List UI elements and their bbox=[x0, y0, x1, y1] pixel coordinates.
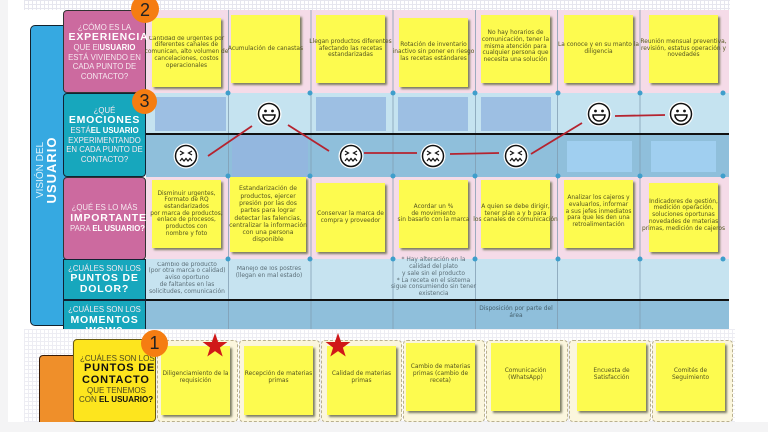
row label: momentos wow: ¿CUÁLES SON LOS bbox=[68, 305, 141, 314]
dotted canvas background lower bbox=[24, 329, 735, 422]
sticky row 3 column 1: por marca de productos, bbox=[150, 211, 223, 217]
happy face 1 bbox=[256, 102, 282, 126]
sticky touchpoint 3: primas bbox=[351, 378, 372, 384]
pain point column 2: (llegan en mal estado) bbox=[236, 272, 302, 278]
sticky row 3 column 1: enlace de procesos, bbox=[157, 217, 216, 223]
sticky row 3 column 2: presión por las dos bbox=[239, 200, 297, 207]
sticky row 3 column 3: compra y proveedor bbox=[321, 218, 380, 224]
sticky touchpoint 7: Comités de bbox=[674, 368, 707, 374]
row label: puntos de dolor: ¿CUÁLES SON LOS bbox=[68, 264, 141, 273]
side bar label: VISIÓN DEL bbox=[35, 142, 46, 198]
sticky row 3 column 2: productos, ejercer bbox=[240, 193, 296, 200]
sticky row 3 column 3 bbox=[316, 183, 385, 252]
emotion block column 2 bbox=[232, 134, 308, 177]
row label: puntos de dolor: PUNTOS DE bbox=[70, 272, 139, 284]
column dividers bbox=[228, 10, 722, 329]
sticky row 3 column 3: Conservar la marca de bbox=[317, 211, 384, 217]
sticky touchpoint 1: requisición bbox=[180, 378, 211, 384]
pain point column 4: * Hay alteración en la bbox=[402, 257, 466, 263]
badge 1: 1 bbox=[149, 333, 160, 353]
sticky row 3 column 1: Disminuir urgentes, bbox=[157, 191, 216, 197]
row 4 background: pain points bbox=[146, 259, 729, 300]
row label: importante: ¿QUÉ ES LO MÁS bbox=[72, 203, 137, 212]
row 1 background: experience bbox=[146, 10, 729, 93]
pain point column 4: y sale sin el producto bbox=[402, 271, 465, 277]
note text row 1 column 1: Cantidad de urgentes por bbox=[149, 36, 224, 42]
row label: experiencia: CONTACTO? bbox=[81, 72, 128, 81]
row label: puntos de contacto: CONTACTO bbox=[82, 374, 150, 386]
row label: experiencia bbox=[63, 10, 146, 93]
row label: puntos de dolor: DOLOR? bbox=[80, 283, 129, 295]
pain point column 1: Cambio de producto bbox=[157, 262, 217, 268]
happy face 2 bbox=[586, 102, 612, 126]
row label: experiencia: QUE ElUSUARIO bbox=[74, 43, 135, 52]
emotion block column 6 bbox=[567, 141, 632, 172]
sticky row 1 column 4: Rotación de inventario bbox=[400, 42, 467, 48]
sticky row 3 column 6: a sus jefes inmediatos bbox=[566, 209, 631, 215]
sticky touchpoint 2: primas bbox=[268, 378, 289, 384]
touchpoint card 1 bbox=[157, 340, 238, 422]
pain point column 1: (por otra marca o calidad) bbox=[148, 268, 226, 274]
badge 2: 2 bbox=[140, 0, 150, 20]
sticky touchpoint 3: Calidad de materias bbox=[332, 371, 391, 377]
wow moment column 5 bbox=[479, 305, 553, 319]
sad face 3 bbox=[420, 144, 446, 168]
sticky row 3 column 4: de movimiento bbox=[411, 211, 456, 217]
sticky row 3 column 5: A quien se debe dirigir, bbox=[481, 204, 550, 210]
sticky row 1 column 1 bbox=[152, 18, 221, 87]
sticky row 3 column 7: novedades de materias bbox=[649, 219, 718, 225]
sticky row 3 column 7: soluciones oportunas bbox=[652, 212, 715, 218]
row 5 background: wow moments bbox=[146, 300, 729, 329]
sticky row 1 column 4 bbox=[399, 18, 468, 87]
sad face 4 bbox=[504, 144, 528, 168]
pain point column 1: aviso oportuno bbox=[165, 275, 209, 281]
wow moment column 5: área bbox=[509, 313, 523, 319]
sticky row 1 column 7: revisión, estatus operación y bbox=[641, 46, 726, 52]
sticky row 3 column 7: primas, medición de cajeros bbox=[642, 226, 725, 232]
note text row 1 column 1: operacionales bbox=[166, 63, 207, 69]
sticky touchpoint 6: Encuesta de bbox=[593, 368, 630, 374]
sticky touchpoint 5: (WhatsApp) bbox=[508, 374, 543, 380]
touchpoint card 7 bbox=[652, 340, 733, 422]
side bar label bbox=[34, 137, 59, 203]
row label: puntos de contacto: PUNTOS DE bbox=[84, 362, 155, 374]
sticky row 1 column 5: necesita una solución bbox=[484, 57, 547, 63]
sticky row 1 column 2: Acumulación de canastas bbox=[228, 46, 303, 52]
sticky row 3 column 2 bbox=[230, 177, 306, 252]
emotion block column 7 bbox=[651, 141, 716, 172]
sticky row 3 column 2: Estandarización de bbox=[239, 185, 297, 192]
sticky row 3 column 6: evaluarlos, informar bbox=[569, 202, 628, 208]
sticky touchpoint 6 bbox=[577, 343, 646, 411]
divider line emotions bbox=[146, 133, 729, 135]
sticky touchpoint 7: Seguimiento bbox=[672, 374, 709, 380]
sticky row 3 column 2: centralizar la información bbox=[229, 222, 307, 229]
sticky touchpoint 4: receta) bbox=[430, 378, 451, 384]
note text row 1 column 1: cancelaciones, costos bbox=[154, 56, 219, 62]
note text row 1 column 1: diferentes canales de bbox=[155, 42, 218, 48]
row 2 upper background: emotions bbox=[146, 93, 729, 134]
row label: momentos wow bbox=[63, 300, 146, 329]
sticky row 3 column 7 bbox=[649, 183, 718, 252]
side bar label: USUARIO bbox=[44, 137, 59, 203]
emotion block column 4 bbox=[398, 97, 468, 131]
row label: importante bbox=[63, 177, 146, 260]
sticky touchpoint 2 bbox=[244, 346, 313, 415]
pain point column 4: sigue consumiendo sin tener bbox=[391, 284, 476, 290]
row label: emociones: ¿QUÉ bbox=[94, 106, 115, 115]
badge 3 bbox=[132, 89, 157, 114]
row label: puntos de contacto: QUE TENEMOS bbox=[87, 386, 146, 395]
sticky row 3 column 5: tener plan a y b para bbox=[484, 211, 546, 217]
sticky row 3 column 7: Indicadores de gestión, bbox=[649, 199, 718, 205]
page margin left bbox=[0, 0, 8, 432]
touchpoint card 5 bbox=[486, 340, 568, 422]
sticky touchpoint 1: Diligenciamiento de la bbox=[162, 371, 229, 377]
sticky row 1 column 7: novedades bbox=[667, 52, 700, 58]
sticky touchpoint 1 bbox=[161, 346, 230, 415]
sticky row 3 column 6: para que les den una bbox=[567, 215, 630, 221]
badge 1 bbox=[141, 330, 168, 357]
row label: emociones: ESTÁEL USUARIO bbox=[70, 126, 139, 135]
row label: puntos de contacto: ¿CUÁLES SON LOS bbox=[80, 354, 155, 363]
row label: puntos de contacto: CON EL USUARIO? bbox=[79, 395, 153, 404]
wow moment column 5: Disposición por parte del bbox=[479, 306, 553, 312]
row label: puntos de dolor bbox=[63, 259, 146, 300]
row label: emociones: EMOCIONES bbox=[69, 114, 140, 126]
sticky touchpoint 3 bbox=[327, 346, 396, 415]
row label: experiencia: ¿CÓMO ES LA bbox=[78, 23, 131, 32]
sticky row 3 column 4 bbox=[399, 180, 468, 248]
sticky row 1 column 2 bbox=[231, 15, 300, 83]
sticky row 1 column 7 bbox=[649, 15, 718, 83]
sticky row 1 column 5 bbox=[481, 15, 550, 83]
sticky row 3 column 1: nombre y foto bbox=[166, 231, 207, 237]
row 3 background: important bbox=[146, 177, 729, 259]
badge 3: 3 bbox=[139, 91, 150, 111]
row label: experiencia: CADA PUNTO DE bbox=[73, 62, 136, 71]
sticky row 3 column 5 bbox=[481, 180, 550, 248]
sad face 1 bbox=[174, 144, 198, 168]
pain point column 2 bbox=[236, 266, 302, 278]
happy face 3 bbox=[668, 102, 694, 126]
sticky row 3 column 4: Acordar un % bbox=[414, 204, 453, 210]
row 2 lower background: emotions bbox=[146, 134, 729, 177]
sticky row 1 column 3 bbox=[316, 15, 385, 83]
sticky row 3 column 6: Analizar los cajeros y bbox=[567, 195, 630, 201]
touchpoint card 2 bbox=[239, 340, 320, 422]
row label: experiencia: EXPERIENCIA bbox=[69, 31, 148, 43]
row label: momentos wow: MOMENTOS bbox=[70, 314, 139, 326]
sticky row 3 column 1: Formato de RQ bbox=[164, 197, 209, 203]
sticky row 3 column 2: partes para lograr bbox=[240, 207, 296, 214]
sad face 2 bbox=[338, 144, 364, 168]
sticky row 1 column 6 bbox=[564, 15, 633, 83]
pain point column 4 bbox=[391, 256, 476, 297]
row label: puntos de contacto bbox=[73, 339, 156, 422]
sticky row 3 column 7: medición operación, bbox=[654, 205, 713, 211]
sticky touchpoint 2: Recepción de materias bbox=[245, 371, 312, 377]
touchpoint card 3 bbox=[321, 340, 402, 422]
pain point column 2: Manejo de los postres bbox=[237, 266, 301, 272]
divider line pain and wow bbox=[146, 299, 729, 301]
row label: importante: PARA EL USUARIO? bbox=[70, 224, 145, 233]
page margin bottom bbox=[0, 422, 768, 432]
sticky row 3 column 1: estandarizados bbox=[164, 204, 209, 210]
sticky row 1 column 5: misma atención para bbox=[484, 44, 547, 50]
badge 2 bbox=[131, 0, 159, 23]
emotion block column 3 bbox=[316, 97, 386, 131]
sticky row 3 column 1 bbox=[152, 180, 221, 248]
sticky row 3 column 2: detectar las falencias, bbox=[234, 214, 302, 222]
emotion block column 5 bbox=[481, 97, 551, 131]
sticky row 1 column 7: Reunión mensual preventiva, bbox=[640, 39, 727, 45]
row label: emociones: EXPERIMENTANDO bbox=[68, 136, 141, 145]
sticky row 1 column 5: cualquier persona que bbox=[482, 50, 548, 56]
icon: red star 1 bbox=[202, 333, 228, 356]
sticky touchpoint 7 bbox=[656, 343, 725, 411]
sticky row 3 column 6 bbox=[564, 180, 633, 248]
sticky row 1 column 3: afectando las recetas bbox=[319, 46, 382, 52]
sticky row 1 column 5: No hay horarios de bbox=[488, 30, 543, 36]
red curve lines bbox=[208, 115, 665, 156]
touchpoint card 6 bbox=[569, 340, 651, 422]
sticky row 1 column 3: estandarizadas bbox=[328, 52, 373, 58]
panel: vision del usuario side bar bbox=[30, 25, 70, 326]
pain point column 1: de faltantes en las bbox=[160, 282, 214, 288]
note text row 1 column 1 bbox=[144, 36, 228, 69]
pain point column 4: existencia bbox=[419, 291, 448, 297]
sticky row 1 column 5: comunicación, tener la bbox=[482, 37, 549, 43]
sticky row 1 column 6: diligencia bbox=[584, 49, 613, 55]
sticky row 3 column 6: retroalimentación bbox=[572, 222, 625, 228]
icon: red star 2 bbox=[326, 333, 350, 356]
pain point column 1: solicitudes, comunicación bbox=[149, 289, 225, 295]
sticky row 1 column 4: las recetas estándares bbox=[400, 56, 467, 62]
sticky touchpoint 6: Satisfacción bbox=[594, 374, 629, 380]
sticky touchpoint 4 bbox=[406, 343, 475, 411]
row label: emociones: CONTACTO? bbox=[81, 155, 128, 164]
sticky row 3 column 5: los canales de comunicación bbox=[473, 217, 558, 223]
sticky row 3 column 1: productos con bbox=[166, 224, 207, 230]
sticky touchpoint 5: Comunicación bbox=[505, 368, 546, 374]
sticky row 1 column 4: inactivo sin poner en riesgo bbox=[393, 49, 474, 55]
sticky row 1 column 3: Llegan productos diferentes bbox=[309, 39, 392, 45]
sticky row 3 column 2: disponible bbox=[252, 236, 284, 243]
sticky row 3 column 4: sin basarlo con la marca bbox=[398, 217, 469, 223]
panel: orange touchpoints side bar bbox=[39, 355, 79, 422]
row label: experiencia: ESTÁ VIVIENDO EN bbox=[68, 53, 141, 62]
dotted canvas background bbox=[24, 0, 730, 10]
touchpoint card 4 bbox=[403, 340, 485, 422]
row label: emociones bbox=[63, 93, 146, 177]
pain point column 4: calidad del plato bbox=[409, 264, 458, 270]
emotion blue blocks bbox=[155, 97, 226, 131]
sticky touchpoint 4: Cambio de materias bbox=[411, 364, 470, 370]
row label: importante: IMPORTANTE bbox=[70, 212, 147, 224]
sticky touchpoint 4: primas (cambio de bbox=[413, 371, 468, 377]
sticky row 3 column 2: con una persona bbox=[243, 229, 293, 236]
sticky touchpoint 5 bbox=[491, 343, 560, 411]
note text row 1 column 1: comunican, alto volumen de bbox=[145, 49, 228, 55]
pain point column 1 bbox=[148, 262, 226, 295]
sticky row 1 column 6: La conoce y en su manto la bbox=[558, 42, 639, 48]
pain point column 4: * La receta en el sistema bbox=[397, 278, 470, 284]
row label: emociones: EN CADA PUNTO DE bbox=[66, 145, 143, 154]
